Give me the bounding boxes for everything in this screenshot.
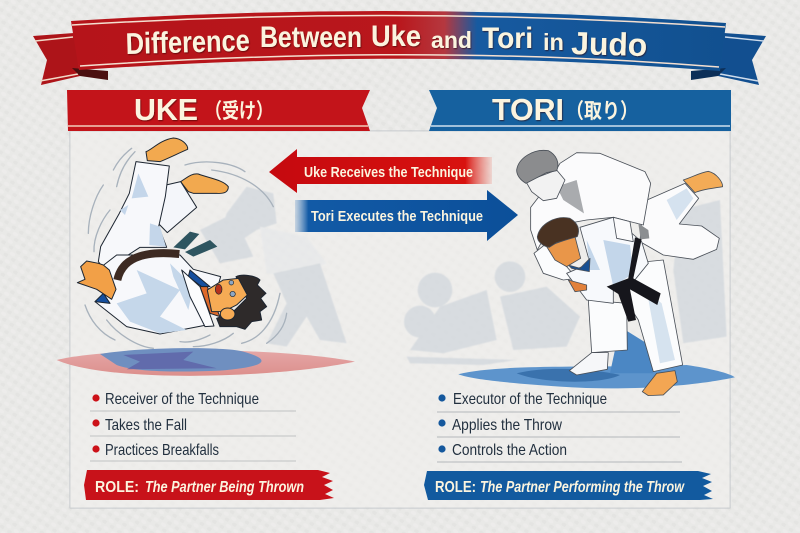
hand xyxy=(77,261,116,299)
role banner: uke xyxy=(84,470,334,500)
tori hair xyxy=(537,218,578,247)
heading: UKE: （受け） xyxy=(205,100,273,123)
ghost figures behind tori xyxy=(404,200,727,365)
floor mat: uke xyxy=(57,348,355,376)
list: uke points xyxy=(90,391,296,461)
point: fall: Takes the Fall xyxy=(105,417,187,434)
title text: Judo xyxy=(571,25,648,63)
panel: main card xyxy=(70,131,730,508)
lower foot xyxy=(181,174,228,193)
title ribbon xyxy=(33,11,766,85)
ghost figure behind uke xyxy=(200,187,347,347)
blue undershirt xyxy=(95,270,210,303)
thrown partner: leg xyxy=(640,183,719,259)
figure: tori throwing xyxy=(517,150,723,396)
thrown partner: belt xyxy=(638,223,649,239)
ear xyxy=(220,308,235,320)
tori torso xyxy=(567,217,648,303)
heading: TORI: （取り） xyxy=(566,100,638,123)
tori front leg xyxy=(623,260,683,372)
arrow: uke receives xyxy=(269,149,492,193)
arrow: tori executes: Tori Executes the Technique xyxy=(311,208,483,225)
heading: TORI xyxy=(429,90,731,131)
neck and lapel xyxy=(200,287,220,317)
upper foot xyxy=(146,138,188,162)
point: action: Controls the Action xyxy=(452,442,567,459)
thrown partner: face xyxy=(526,170,565,201)
title text: Uke xyxy=(371,20,421,53)
heading: UKE: UKE xyxy=(134,92,198,127)
role banner: uke: ROLE: xyxy=(95,479,139,496)
back leg sleeve xyxy=(155,182,197,233)
arrow: uke receives: Uke Receives the Technique xyxy=(304,164,473,181)
face xyxy=(207,278,247,312)
thrown partner: top foot xyxy=(683,171,723,193)
floor mat: tori xyxy=(458,327,735,388)
list: tori points xyxy=(437,391,682,462)
belt xyxy=(117,253,179,280)
title text xyxy=(125,20,648,63)
tori face xyxy=(547,237,581,267)
thrown partner: collar xyxy=(557,180,584,213)
point: breakfalls: Practices Breakfalls xyxy=(105,442,219,459)
ribbon body xyxy=(71,11,726,71)
ribbon left tail xyxy=(33,33,108,85)
point: executor: Executor of the Technique xyxy=(453,391,607,408)
partner's gripping sleeve xyxy=(613,217,633,242)
torso xyxy=(95,255,221,334)
ribbon right tail xyxy=(691,33,766,85)
title text: Tori xyxy=(482,22,533,55)
point: receiver: Receiver of the Technique xyxy=(105,391,259,408)
title text: Difference xyxy=(125,25,250,61)
tori bare foot xyxy=(642,371,677,396)
tori arm xyxy=(534,243,577,280)
role banner: tori xyxy=(424,471,713,500)
title text: Between xyxy=(260,21,362,54)
thrown partner: hair xyxy=(517,150,558,183)
tori belt xyxy=(607,237,661,322)
role banner: tori: The Partner Performing the Throw xyxy=(480,479,685,496)
heading: UKE xyxy=(67,90,370,131)
tori back leg xyxy=(588,300,627,353)
belt ends xyxy=(173,232,217,257)
tori hand xyxy=(568,280,587,292)
tori sock xyxy=(569,353,608,375)
heading: TORI: TORI xyxy=(492,92,564,127)
tori collar xyxy=(568,258,590,272)
arrow: tori executes xyxy=(295,190,518,241)
figure: uke falling xyxy=(77,138,287,348)
point: throw: Applies the Throw xyxy=(452,417,562,434)
thrown partner: body xyxy=(531,153,651,250)
front leg xyxy=(98,162,169,270)
role banner: uke: The Partner Being Thrown xyxy=(145,479,304,496)
role banner: tori: ROLE: xyxy=(435,479,476,496)
hair back xyxy=(217,275,267,329)
title text: in xyxy=(543,29,564,55)
eyes and mouth xyxy=(230,291,235,297)
motion lines xyxy=(85,148,287,348)
title text: and xyxy=(431,27,472,53)
